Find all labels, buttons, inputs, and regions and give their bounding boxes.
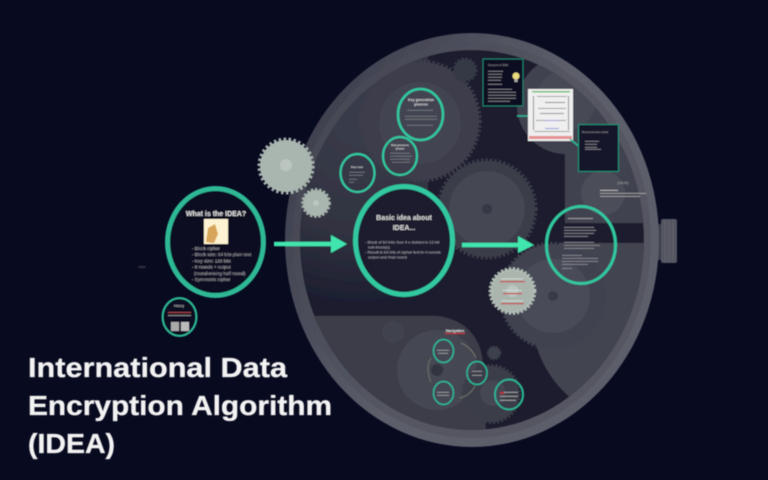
text: basic idea body: output and final round <box>368 254 407 260</box>
outer gear large <box>260 140 312 192</box>
watch case with dial <box>284 32 678 448</box>
arrow: first <box>274 235 347 253</box>
title: Encryption Algorithm <box>28 390 332 421</box>
icon: portrait <box>204 219 228 244</box>
text: basic idea body: - Block of 64 bits: four 4 x divided in 12-bit <box>365 240 440 244</box>
panel: key generation: Key generation <box>408 98 434 102</box>
panel: dark card with bulb: Structure of IDEA <box>488 63 508 67</box>
list: IDEA facts: - Block cipher <box>192 246 220 251</box>
gear: lower <box>463 366 519 422</box>
title: International Data <box>28 352 287 383</box>
text: right note <box>600 181 646 197</box>
upper right plate <box>564 142 644 224</box>
title <box>28 352 332 459</box>
title: (IDEA) <box>28 428 115 459</box>
panel: key generation: process <box>414 102 428 106</box>
panel: key process <box>383 137 417 175</box>
panel: history: History <box>174 304 184 308</box>
panel: key size <box>340 154 374 192</box>
panel: basic idea <box>356 186 452 294</box>
gear: right lower <box>502 242 561 348</box>
heading: basic idea: IDEA... <box>393 225 415 232</box>
side caption: IDEA <box>138 265 146 269</box>
text: basic idea body: - Result is 64 bits of cipher text in 4 rounds <box>365 250 441 254</box>
list: IDEA facts: (round-mixing half round) <box>194 271 246 276</box>
panel: notes card: Round operation detail <box>582 130 609 134</box>
text: right note: (n/a tb) <box>617 181 629 185</box>
connector: diagram to notes card <box>570 139 582 149</box>
small gear lower <box>488 347 500 359</box>
heading: navigation: Navigation <box>446 329 464 333</box>
list: IDEA facts: - Key size: 128 bits <box>192 258 232 263</box>
panel: what is the IDEA <box>168 188 264 296</box>
connector: card to diagram <box>517 115 529 117</box>
heading: what is the IDEA: What is the IDEA? <box>186 211 246 218</box>
panel: notes card <box>578 124 618 172</box>
outer gear small <box>303 190 329 216</box>
gear: top small <box>454 59 476 81</box>
heading: basic idea: Basic idea about <box>376 215 432 222</box>
upper left plate <box>300 56 428 282</box>
icon: light bulb <box>512 72 520 82</box>
node: lower right <box>495 380 523 410</box>
panel: history <box>162 298 196 336</box>
panel: key process: phase <box>396 147 405 151</box>
gear badge: red text <box>490 269 534 313</box>
panel: IDEA round diagram <box>528 89 573 141</box>
gear: right disc <box>581 171 625 215</box>
lower right plate <box>537 242 644 396</box>
arrow: second <box>462 236 534 253</box>
watch crown <box>654 219 677 263</box>
navigation plate <box>314 316 486 430</box>
panel: key process: Key process <box>391 143 409 147</box>
node: top <box>434 340 454 362</box>
gear: center <box>439 161 535 257</box>
list: IDEA facts: - Block size: 64 bits plain text <box>192 252 252 257</box>
node: right <box>467 362 487 384</box>
panel: operations <box>546 206 616 284</box>
navigation group <box>428 329 523 410</box>
list: IDEA facts: - 8 rounds + output <box>192 265 231 270</box>
text: basic idea body: sub-block(s) <box>368 244 390 250</box>
panel: key generation <box>398 89 443 140</box>
panel: key size: Key size <box>351 165 363 169</box>
gear: top <box>408 60 482 182</box>
arrows: cycle <box>428 343 476 398</box>
list: IDEA facts: - Symmetric cipher <box>192 277 231 282</box>
panel: dark card with bulb <box>483 59 523 106</box>
node: bottom <box>434 382 454 404</box>
